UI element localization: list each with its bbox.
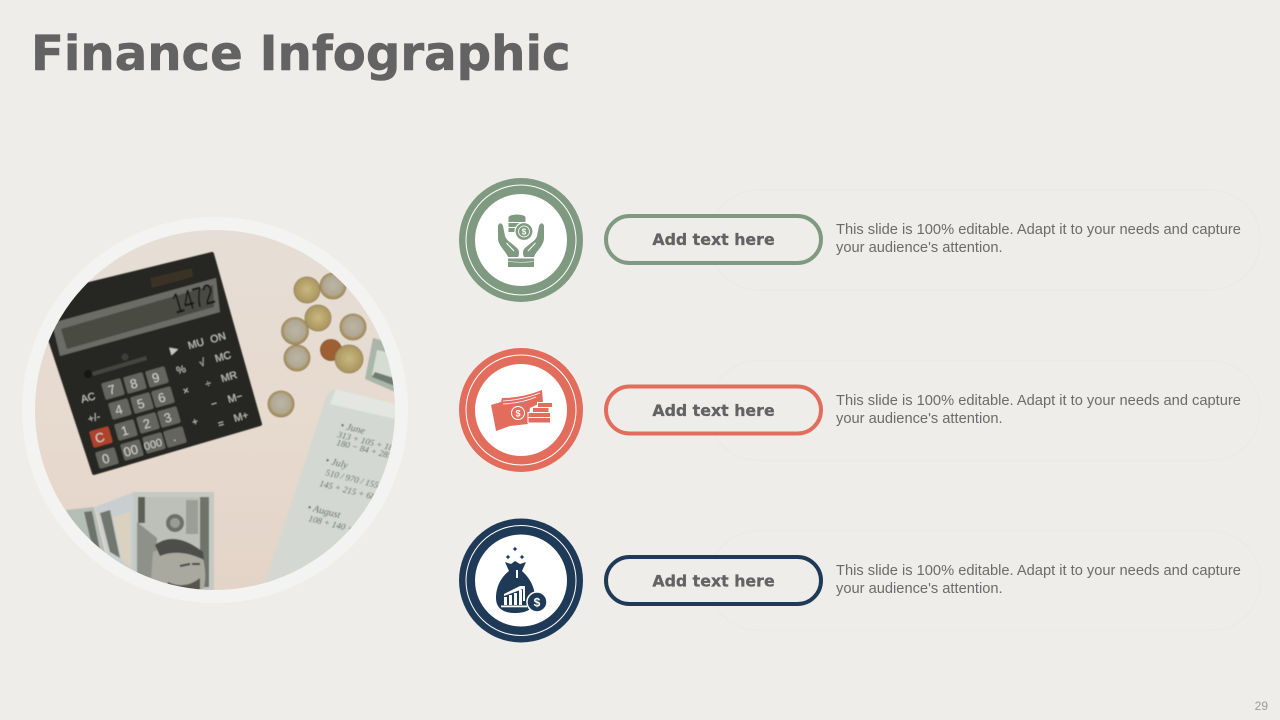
handwritten notepad: 145 + 215 + 685: [319, 478, 381, 503]
calculator: 8: [128, 375, 139, 392]
page number: 29: [1255, 699, 1268, 713]
calculator: 5: [135, 395, 146, 412]
calculator: 00: [122, 441, 140, 460]
calculator: C: [93, 429, 106, 446]
calculator: ÷: [204, 377, 213, 391]
calculator: −: [210, 398, 219, 411]
calculator: %: [175, 363, 187, 377]
calculator: MU: [187, 336, 206, 352]
calculator: ON: [209, 330, 227, 346]
calculator: ▶: [169, 343, 181, 357]
icon badge: money bag with chart: [459, 518, 583, 642]
calculator: √: [198, 356, 207, 370]
row 2: red item: [459, 348, 1260, 472]
calculator: 1: [119, 422, 130, 439]
calculator: 000: [143, 437, 164, 453]
calculator: =: [217, 418, 226, 431]
calculator: MR: [220, 369, 239, 385]
calculator: 4: [113, 401, 124, 418]
icon badge: banknotes and coins: $: [515, 408, 521, 418]
handwritten notepad: 313 + 105 + 185: [336, 429, 399, 454]
calculator: AC: [80, 390, 97, 406]
handwritten notepad: [265, 389, 395, 583]
icon badge: money bag with chart: $: [534, 596, 541, 610]
description 1: This slide is 100% editable. Adapt it to your needs and capture: [836, 222, 1241, 238]
calculator: 7: [106, 381, 117, 398]
background pill 1: [708, 190, 1260, 290]
banknote at right edge: [364, 338, 394, 392]
calculator: 3: [162, 409, 173, 426]
calculator: +: [191, 416, 200, 429]
description 2: This slide is 100% editable. Adapt it to your needs and capture: [836, 393, 1241, 409]
label pill 3: [606, 557, 821, 604]
banknotes: [66, 492, 214, 592]
background pill 3: [708, 530, 1260, 630]
calculator: [36, 254, 260, 473]
calculator: 6: [156, 389, 167, 406]
calculator: M+: [232, 409, 250, 425]
description 3: This slide is 100% editable. Adapt it to your needs and capture: [836, 563, 1241, 579]
coins: [268, 273, 366, 417]
calculator: 1472: [169, 278, 218, 321]
handwritten notepad: 108 + 140 + 31: [308, 513, 365, 537]
background pill 2: [708, 360, 1260, 460]
handwritten notepad: 510 / 970 / 155: [325, 467, 380, 490]
title: Finance Infographic: [31, 26, 571, 82]
icon badge: hands holding coins: $: [522, 228, 527, 236]
calculator: MC: [214, 349, 233, 365]
calculator: +/-: [86, 410, 102, 426]
handwritten notepad: • July: [324, 455, 349, 472]
description 2: your audience's attention.: [836, 411, 1003, 427]
description 1: your audience's attention.: [836, 240, 1003, 256]
icon badge: hands holding coins: [459, 178, 583, 302]
handwritten notepad: • August: [306, 502, 342, 521]
label pill 3: Add text here: [652, 572, 775, 590]
calculator: ×: [182, 385, 191, 398]
description 3: your audience's attention.: [836, 581, 1003, 597]
label pill 2: [606, 386, 821, 434]
calculator: 0: [100, 450, 111, 467]
icon badge: banknotes and coins: [459, 348, 583, 472]
calculator: .: [170, 429, 178, 444]
label pill 1: Add text here: [652, 230, 775, 249]
calculator: M−: [226, 390, 244, 406]
calculator: 9: [150, 369, 161, 386]
handwritten notepad: 180 − 84 + 285: [336, 437, 394, 461]
photo: calculator, coins and banknotes in a ringed circle: [35, 230, 395, 590]
label pill 2: Add text here: [652, 401, 775, 420]
row 1: green item: [459, 178, 1260, 302]
calculator: 2: [141, 415, 152, 432]
row 3: navy item: [459, 518, 1260, 642]
handwritten notepad: • June: [339, 420, 367, 437]
label pill 1: [606, 216, 821, 263]
